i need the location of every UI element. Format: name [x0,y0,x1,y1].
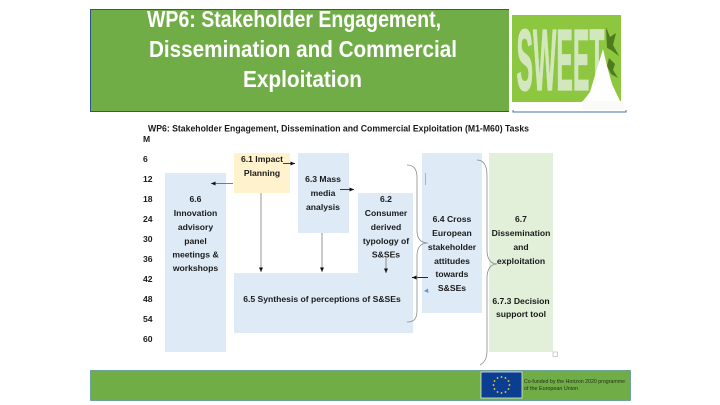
month axis [143,134,153,344]
panel: 6.2 consumer typology: 6.2 [380,194,392,204]
logo: SWEET [512,12,626,112]
arrow: 6.3 to 6.2 [340,188,354,190]
panel: 6.4 cross european: 6.4 Cross [433,214,472,224]
icon: EU flag [481,372,522,398]
panel: 6.5 synthesis [234,273,413,333]
panel: 6.4 cross european: attitudes [434,256,470,266]
month axis: 36 [143,254,153,264]
title: Dissemination and Commercial [149,36,457,62]
panel: 6.3 mass media: 6.3 Mass [305,174,341,184]
panel: 6.4 cross european: stakeholder [428,242,477,252]
panel: 6.6 innovation advisory: 6.6 [190,194,202,204]
month axis: 48 [143,294,153,304]
arrow: 6.2 to 6.5 [385,258,387,273]
panel: 6.3 mass media: media [311,188,336,198]
cursor mark [424,173,426,185]
panel: 6.2 consumer typology: derived [371,222,401,232]
panel: 6.4 cross european: S&SEs [438,283,466,293]
panel: 6.2 consumer typology: typology of [363,236,409,246]
footer funding text: of the European Union [524,386,578,392]
subtitle: WP6: Stakeholder Engagement, Dissemination and Commercial Exploitation (M1-M60) Tasks [148,124,529,134]
panel: 6.1 impact planning: Planning [244,168,280,178]
panel: 6.7 dissemination: 6.7 [515,214,527,224]
panel: 6.6 innovation advisory: panel [184,236,207,246]
month axis: 24 [143,214,153,224]
panel: 6.7 dissemination [489,153,553,352]
panel: 6.2 consumer typology: S&SEs [372,250,400,260]
small blue marker [424,288,428,293]
panel: 6.6 innovation advisory: meetings & [172,250,219,260]
panel: 6.7 dissemination: Dissemination [492,228,550,238]
panel: 6.6 innovation advisory: advisory [178,222,213,232]
panel: 6.2 consumer typology: Consumer [365,208,408,218]
arrow: 6.1 to 6.5 [260,193,262,272]
title: Exploitation [243,66,362,92]
footer funding text: Co-funded by the Horizon 2020 programme [524,379,625,385]
panel: 6.4 cross european [422,153,482,313]
panel: 6.6 innovation advisory [165,173,226,352]
title [147,6,457,92]
month axis: 30 [143,234,153,244]
header banner [90,6,509,112]
panel: 6.3 mass media [298,153,349,233]
arrow: 6.1 to 6.3 [283,162,295,164]
panel: 6.4 cross european: towards [436,269,469,279]
panel: 6.7 dissemination: 6.7.3 Decision [492,296,550,306]
panel: 6.7 dissemination: and [513,242,529,252]
footer bar [90,370,630,400]
panel: 6.5 synthesis: 6.5 Synthesis of perceptions of S&SEs [243,294,401,304]
panel: 6.3 mass media: analysis [306,202,340,212]
arrow: 6.4 to 6.5 [412,276,428,278]
panel: 6.6 innovation advisory: Innovation [174,208,217,218]
month axis: 60 [143,334,153,344]
arrow: 6.1 to 6.6 [211,182,233,184]
panel: 6.4 cross european: European [432,228,472,238]
brace: tasks 6.4 to 6.7 [477,160,497,365]
panel: 6.1 impact planning [234,153,290,193]
panel: 6.1 impact planning: 6.1 Impact [241,154,283,164]
footer funding text [524,379,625,392]
panel: 6.7 dissemination: exploitation [497,256,545,266]
month axis: 18 [143,194,153,204]
panel: 6.2 consumer typology [358,193,413,273]
month axis: 54 [143,314,153,324]
month axis: 12 [143,174,153,184]
month axis: 42 [143,274,153,284]
month axis: 6 [143,154,148,164]
title: WP6: Stakeholder Engagement, [147,6,441,32]
month axis: M [143,134,150,144]
brace: tasks 6.1 to 6.5 [407,165,428,322]
selection handle [553,352,558,356]
panel: 6.6 innovation advisory: workshops [172,263,218,273]
arrow: 6.3 to 6.5 [321,233,323,272]
panel: 6.7 dissemination: support tool [496,309,546,319]
